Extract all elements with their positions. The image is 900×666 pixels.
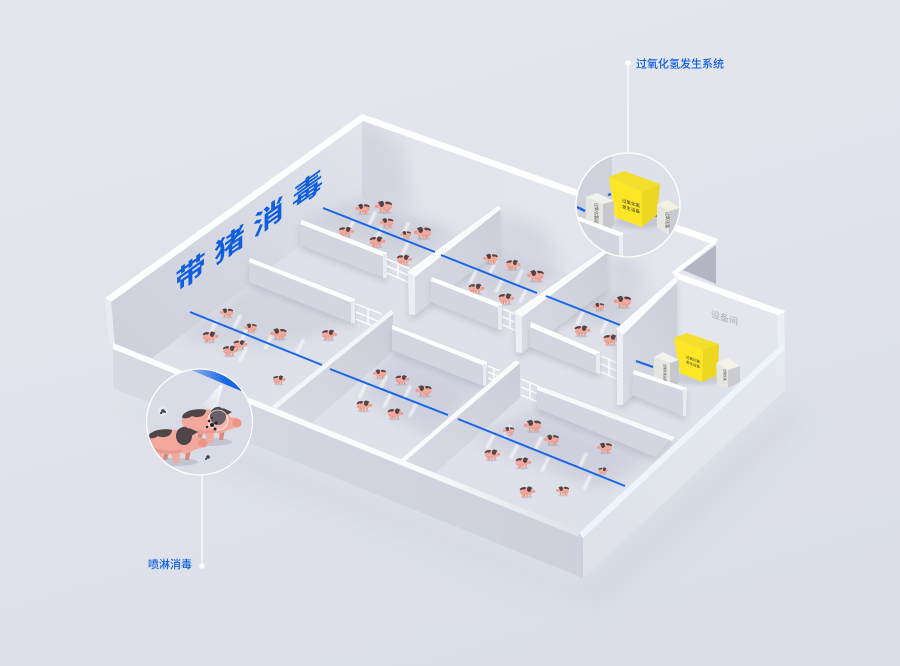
left cabinet: 过氧化氢设备 <box>594 203 600 227</box>
low wall: room 2 <box>431 277 502 330</box>
equipment: right cabinet (room): 过氧化氢 <box>723 369 728 381</box>
dark rear corner of back wall <box>683 245 716 284</box>
back wall <box>362 118 716 320</box>
blue disinfection pipes <box>190 208 625 486</box>
partition wall C <box>616 277 678 405</box>
room 3 sprays and pigs <box>575 296 631 347</box>
spray cone <box>204 384 223 410</box>
room 1 sprays and pigs <box>339 201 431 266</box>
building ground shadow <box>120 395 810 610</box>
building structure <box>105 114 785 578</box>
fence: middle room <box>488 366 500 382</box>
equipment: left cabinet (room): 过氧化氢设备 <box>663 364 668 382</box>
equipment: hydrogen peroxide generator (room): 过氧化氢 <box>686 354 700 364</box>
yellow generator: 发生设备 <box>622 203 640 215</box>
label: equipment room: 设备间 <box>711 308 738 327</box>
left wall <box>108 118 362 358</box>
fence: left room <box>356 304 382 327</box>
middle room sprays and pigs <box>357 369 432 421</box>
room 2 sprays and pigs <box>469 254 544 306</box>
low wall: room 1 <box>300 220 387 278</box>
leader line <box>627 63 629 153</box>
partition wall D <box>272 310 394 423</box>
low wall: room 3 <box>530 322 600 374</box>
blue nozzle pipe <box>192 370 242 391</box>
infographic canvas <box>105 58 798 611</box>
partition wall E <box>400 360 520 473</box>
floor shading <box>173 198 655 490</box>
low wall: equipment room <box>632 370 687 416</box>
right cabinet: 过氧化氢 <box>665 212 671 228</box>
equipment: left cabinet (room) <box>654 352 679 396</box>
yellow generator: 过氧化氢 <box>622 197 640 209</box>
leader line <box>201 475 203 566</box>
right cabinet <box>657 200 680 235</box>
germ bottom <box>205 455 210 460</box>
fence: right room <box>521 379 538 402</box>
partition wall B <box>514 249 608 353</box>
back pig <box>182 407 242 446</box>
right room sprays and pigs <box>485 420 612 499</box>
leader dot <box>199 563 205 569</box>
germ left <box>158 406 168 416</box>
equipment: hydrogen peroxide generator (room): 发生设备 <box>686 359 700 369</box>
pipe: equipment room <box>636 361 740 380</box>
low wall G: left room <box>249 258 355 323</box>
low wall K: right room <box>537 385 675 457</box>
back wall cast shadows <box>362 130 650 300</box>
fence: room 2 <box>503 309 517 331</box>
equipment: right cabinet (room) <box>716 358 740 388</box>
callout: hydrogen peroxide generator <box>570 56 724 262</box>
front pig <box>148 427 208 466</box>
low wall in circle <box>578 216 623 256</box>
fence: room 3 <box>601 356 617 379</box>
floor <box>113 198 785 533</box>
fence: room 1 <box>387 259 410 283</box>
callout: spray disinfection <box>146 368 254 570</box>
top wall edge <box>105 114 718 302</box>
magnifier circle <box>148 370 248 466</box>
left room sprays and pigs <box>203 308 337 385</box>
equipment room back wall <box>672 240 785 388</box>
equipment: hydrogen peroxide generator (room) <box>670 333 730 385</box>
left cabinet <box>586 193 614 228</box>
low wall J: middle room <box>392 325 487 386</box>
magnifier circle <box>576 156 680 256</box>
wall title: 带猪消毒 <box>175 158 331 299</box>
callout label: 喷淋消毒 <box>148 557 192 571</box>
left wall end <box>105 298 115 346</box>
leader dot <box>625 60 631 66</box>
germ cluster on pig <box>206 410 228 430</box>
callout label: 过氧化氢发生系统 <box>636 56 724 70</box>
front wall <box>113 343 583 578</box>
partition wall A <box>407 206 501 315</box>
yellow generator <box>609 171 660 227</box>
right wall <box>579 343 785 578</box>
